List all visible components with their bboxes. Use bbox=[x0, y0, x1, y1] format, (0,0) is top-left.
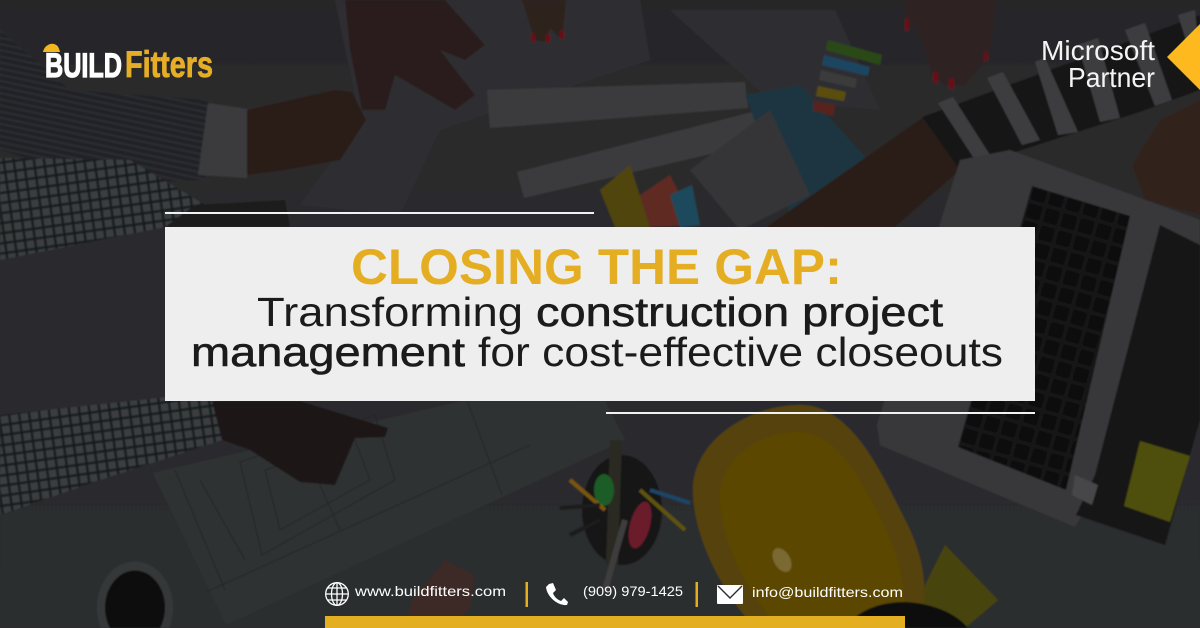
icon: yellow diamond bbox=[1167, 24, 1200, 90]
Microsoft Partner badge bbox=[1041, 24, 1200, 93]
blueprint sheet lower left bbox=[153, 400, 625, 625]
hair bbox=[1132, 100, 1200, 215]
documents and colored chart bbox=[600, 10, 895, 240]
striped sleeve bbox=[922, 10, 1200, 170]
Microsoft label: Microsoft bbox=[1041, 35, 1155, 66]
logo: BUILDFitters bbox=[43, 44, 213, 85]
top red nail hand bbox=[522, 0, 566, 43]
watch hand bbox=[165, 200, 290, 227]
top right hand bbox=[905, 0, 995, 89]
pointing hand bbox=[212, 401, 388, 485]
laptop hinge bbox=[1072, 475, 1098, 505]
lower checked sleeve bbox=[0, 392, 222, 515]
forearm hand bbox=[247, 90, 366, 175]
subtitle line 1: construction project bbox=[536, 289, 944, 335]
subtitle bbox=[191, 289, 1003, 375]
icon: phone bbox=[546, 583, 568, 605]
icon: globe bbox=[326, 583, 348, 605]
subtitle line 2 bbox=[191, 329, 1003, 375]
left shirt sleeve bbox=[0, 30, 210, 185]
left checked sleeve bbox=[0, 158, 205, 260]
coffee cup bbox=[97, 561, 173, 628]
white cuff bbox=[198, 103, 254, 178]
forearm bbox=[765, 118, 960, 228]
separator bbox=[696, 582, 698, 607]
wordmark Fitters: Fitters bbox=[125, 44, 213, 85]
top rule bbox=[165, 212, 594, 214]
hard hat bbox=[693, 405, 924, 628]
laptop bbox=[877, 150, 1200, 527]
phone number: (909) 979-1425 bbox=[583, 583, 683, 599]
yellow note on notebook bbox=[1124, 441, 1190, 522]
heading: CLOSING THE GAP: bbox=[351, 239, 842, 295]
dark object at bottom bbox=[845, 602, 968, 628]
subtitle line 1: Transforming bbox=[257, 289, 523, 335]
dark notebook bbox=[1076, 225, 1200, 545]
paper rolls bbox=[487, 82, 778, 198]
icon: hard hat bbox=[43, 44, 60, 52]
contact row bbox=[326, 582, 903, 607]
pencil cup bbox=[560, 440, 690, 590]
top center hand bbox=[345, 0, 485, 110]
Partner label: Partner bbox=[1068, 62, 1155, 93]
subtitle line 2: for cost-effective closeouts bbox=[478, 329, 1003, 375]
subtitle line 1 bbox=[257, 289, 944, 335]
wordmark BUILD: BUILD bbox=[45, 47, 122, 85]
icon: envelope bbox=[717, 585, 743, 604]
title panel bbox=[165, 227, 1035, 401]
website: www.buildfitters.com bbox=[354, 583, 506, 599]
yellow sticky note with clips bbox=[915, 545, 998, 628]
email: info@buildfitters.com bbox=[752, 584, 903, 600]
separator bbox=[526, 582, 528, 607]
lower red nail hand bbox=[405, 560, 474, 628]
top white paper bbox=[300, 0, 650, 215]
bottom rule bbox=[606, 412, 1035, 414]
yellow footer bar bbox=[325, 616, 905, 628]
subtitle line 2: management bbox=[191, 329, 466, 375]
